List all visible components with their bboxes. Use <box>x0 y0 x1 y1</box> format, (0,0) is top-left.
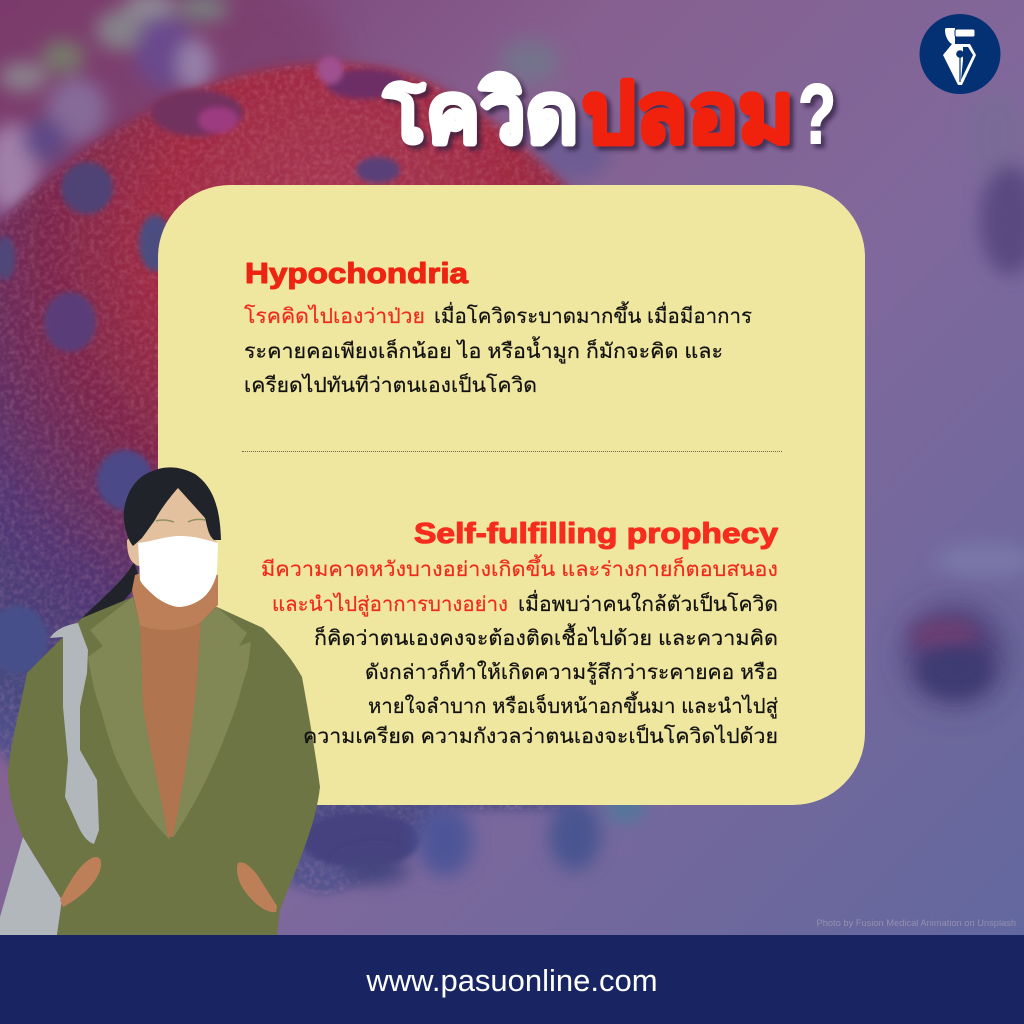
body line 2: และนำไปสู่อาการบางอย่าง <box>272 592 508 617</box>
footer bar <box>0 935 1024 1024</box>
pocket left <box>60 857 101 907</box>
scarf <box>132 560 218 630</box>
body line 3: ก็คิดว่าตนเองคงจะต้องติดเชื้อไปด้วย และความคิด <box>314 623 778 650</box>
title: โควิดปลอม?: ควิด <box>426 66 578 160</box>
title: โควิดปลอม?: โ <box>383 81 425 157</box>
panel: yellow text card <box>158 185 865 805</box>
body line 2: เมื่อพบว่าคนใกล้ตัวเป็นโควิด <box>518 590 778 616</box>
body line 3: เครียดไปทันทีว่าตนเองเป็นโควิด <box>244 371 537 397</box>
illustration: woman wearing face mask <box>0 467 320 935</box>
title: โควิดปลอม?: ปลอม <box>582 66 794 160</box>
eyebrows <box>156 519 205 522</box>
lapel right <box>173 607 251 838</box>
text: Self-fulfilling prophecy section <box>261 518 778 748</box>
body line 1: มีความคาดหวังบางอย่างเกิดขึ้น และร่างกายก็ตอบสนอง <box>261 554 778 581</box>
face <box>127 488 218 566</box>
footer website url: www.pasuonline.com <box>366 963 658 998</box>
icon: pen nib logo <box>920 14 1000 94</box>
lapel left <box>88 597 170 840</box>
divider: dotted line <box>242 451 782 452</box>
body line 1: โรคคิดไปเองว่าป่วย <box>244 304 425 328</box>
body line 2: ระคายคอเพียงเล็กน้อย ไอ หรือน้ำมูก ก็มักจะคิด และ <box>244 336 723 364</box>
heading: Hypochondria: Hypochondria <box>245 258 469 290</box>
body line 4: ดังกล่าวก็ทำให้เกิดความรู้สึกว่าระคายคอ หรือ <box>365 658 778 685</box>
heading: Self-fulfilling prophecy: Self-fulfilling prophecy <box>414 518 778 550</box>
body line 1: เมื่อโควิดระบาดมากขึ้น เมื่อมีอาการ <box>434 301 752 328</box>
face mask <box>138 536 218 607</box>
coat <box>8 597 320 935</box>
body line 6: ความเครียด ความกังวลว่าตนเองจะเป็นโควิดไปด้วย <box>303 722 778 748</box>
text: Hypochondria section <box>244 258 752 397</box>
title: โควิดปลอม?: ? <box>798 67 836 161</box>
title: โควิดปลอม? <box>381 66 840 161</box>
pocket right <box>237 862 277 912</box>
ponytail <box>82 562 140 622</box>
hair <box>124 467 221 546</box>
body line 2 <box>272 590 778 617</box>
bag <box>0 837 62 935</box>
sweater <box>140 622 201 837</box>
body line 5: หายใจลำบาก หรือเจ็บหน้าอกขึ้นมา และนำไปสู่ <box>368 691 778 719</box>
body line 1 <box>244 301 752 328</box>
bag strap <box>50 623 99 844</box>
photo credit: Photo by Fusion Medical Animation on Unsplash <box>817 918 1016 928</box>
